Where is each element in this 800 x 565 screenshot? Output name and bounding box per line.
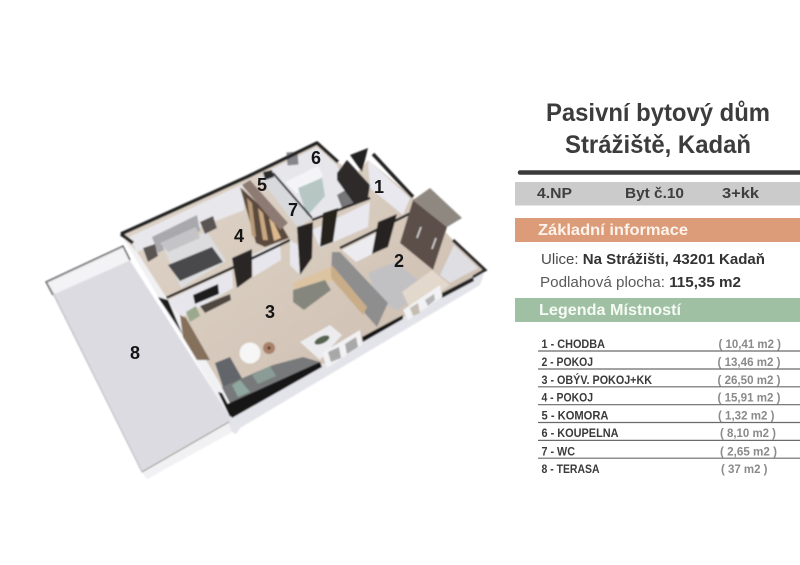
windows (322, 285, 442, 368)
komora wardrobe (240, 180, 289, 247)
exterior front wall (230, 270, 485, 434)
apartment floor (121, 143, 485, 418)
WC and storage (258, 173, 312, 228)
room legend table: 6 - KOUPELNA (542, 426, 619, 440)
sofa (215, 357, 320, 405)
hallway cabinet (337, 160, 370, 205)
apartment bar: Byt č.10 (625, 185, 684, 202)
room legend table: 2 - POKOJ (542, 355, 593, 369)
room legend table: ( 37 m2 ) (721, 462, 768, 476)
room numbers: 4 (234, 226, 244, 246)
title divider (520, 170, 800, 175)
room legend table: ( 15,91 m2 ) (718, 390, 780, 404)
section header: room legend (515, 298, 800, 322)
left wall (121, 234, 236, 418)
room numbers: 2 (394, 251, 404, 271)
hallway wall (368, 160, 410, 215)
room legend table: 4 - POKOJ (542, 390, 593, 404)
room legend table: 3 - OBÝV. POKOJ+KK (542, 372, 652, 387)
structural door and pillar (290, 222, 313, 275)
terrace (46, 246, 232, 479)
dining table (300, 325, 342, 360)
kitchen divider (330, 252, 388, 327)
title: Pasivní bytový dům (546, 99, 770, 127)
top outer walls (121, 143, 338, 234)
title: Strážiště, Kadaň (565, 131, 751, 159)
wall between bedroom and living room (168, 270, 233, 322)
room numbers: 8 (130, 343, 140, 363)
apartment bar (515, 182, 800, 206)
floor area text: Podlahová plocha: 115,35 m2 (540, 274, 741, 291)
storage details (263, 170, 274, 180)
room legend table: 5 - KOMORA (542, 408, 609, 422)
room 2 partition (340, 212, 413, 248)
section header: room legend: Legenda Místností (539, 302, 682, 319)
bedroom back wall (129, 184, 244, 252)
section header: basic information (515, 218, 800, 242)
apartment bar: 3+kk (722, 185, 760, 202)
room legend table: ( 1,32 m2 ) (718, 408, 774, 422)
room numbers: 7 (288, 200, 298, 220)
room 2 wardrobe (400, 188, 462, 270)
front wall dark strip (225, 277, 474, 418)
title (546, 99, 770, 159)
room legend table: ( 13,46 m2 ) (718, 355, 780, 369)
coffee tables (240, 342, 275, 364)
section header: basic information: Základní informace (538, 222, 688, 239)
room numbers: 1 (374, 177, 384, 197)
room numbers (130, 148, 404, 363)
room numbers: 3 (265, 302, 275, 322)
apartment bar: 4.NP (537, 185, 572, 202)
kitchen counter (293, 267, 332, 310)
floor plan illustration (46, 143, 485, 479)
room legend table: 7 - WC (542, 444, 575, 458)
room legend table (538, 337, 800, 476)
room legend table: ( 26,50 m2 ) (718, 373, 780, 387)
room numbers: 5 (257, 175, 267, 195)
room legend table: ( 8,10 m2 ) (720, 426, 776, 440)
room 2 window wall (440, 245, 478, 283)
bathroom door (320, 208, 338, 247)
entrance door (350, 148, 368, 172)
bed (143, 215, 226, 288)
room legend table: 8 - TERASA (542, 462, 600, 476)
room 2 rug and bed (368, 262, 450, 312)
wall below bathroom (312, 202, 370, 248)
room numbers: 6 (311, 148, 321, 168)
room legend table: ( 10,41 m2 ) (718, 337, 781, 351)
room 2 door (372, 214, 397, 254)
room legend table: 1 - CHODBA (542, 337, 605, 351)
bathroom (270, 147, 355, 220)
bedroom door (232, 249, 252, 288)
tv console (186, 284, 231, 322)
room legend table: ( 2,65 m2 ) (720, 444, 777, 458)
address text: Ulice: Na Strážišti, 43201 Kadaň (541, 251, 765, 268)
